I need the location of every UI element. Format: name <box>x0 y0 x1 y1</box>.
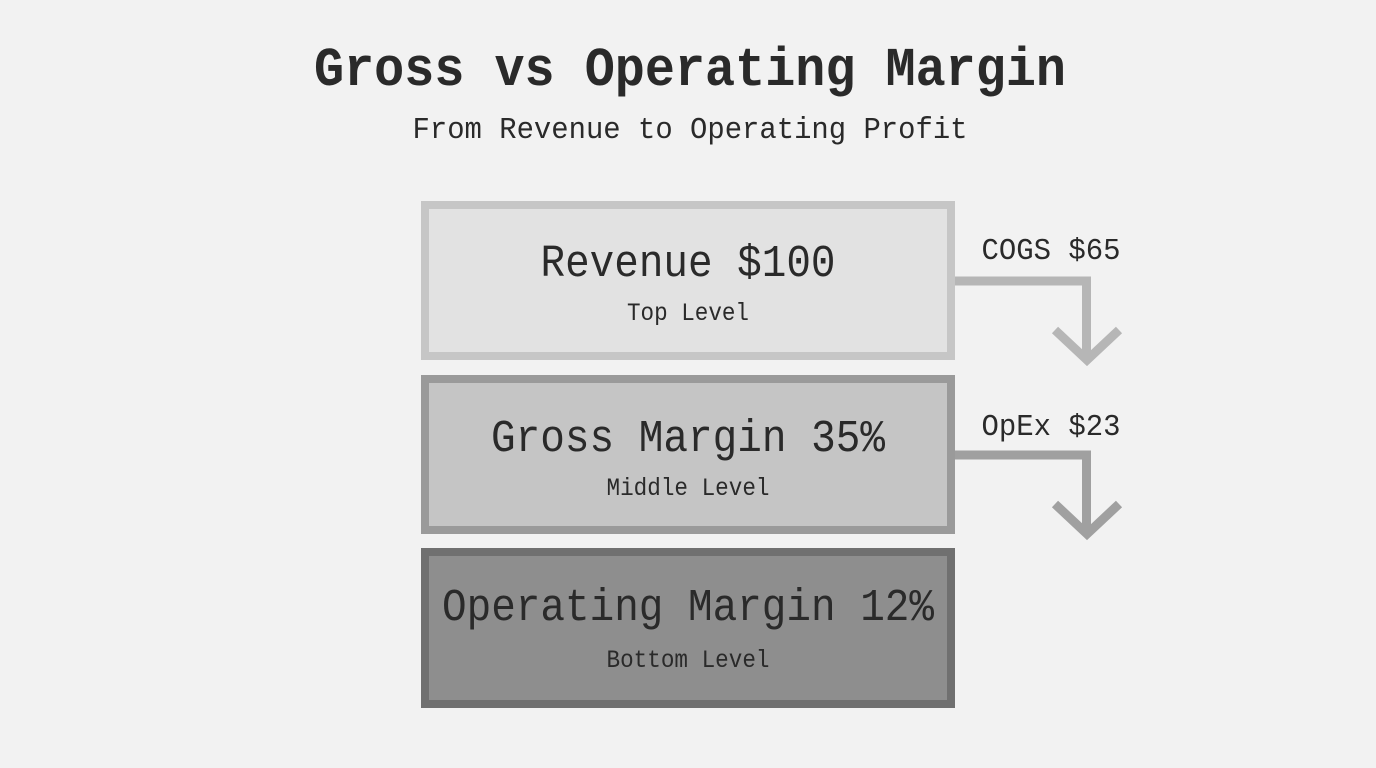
title: Gross vs Operating Margin <box>314 39 1066 102</box>
panel: gross margin level <box>425 379 951 530</box>
gross margin level label: Middle Level <box>606 474 770 503</box>
panel: revenue level <box>425 205 951 356</box>
label: OpEx: OpEx $23 <box>982 410 1120 445</box>
revenue value: Revenue $100 <box>540 239 836 290</box>
revenue level label: Top Level <box>627 299 749 328</box>
arrow: OpEx deduction <box>955 455 1119 534</box>
subtitle: From Revenue to Operating Profit <box>412 113 968 148</box>
operating margin value: Operating Margin 12% <box>442 583 935 634</box>
arrow: COGS deduction <box>955 281 1119 360</box>
operating margin level label: Bottom Level <box>606 646 770 675</box>
label: COGS: COGS $65 <box>982 234 1120 269</box>
panel: operating margin level <box>425 552 951 704</box>
gross margin value: Gross Margin 35% <box>491 414 886 465</box>
